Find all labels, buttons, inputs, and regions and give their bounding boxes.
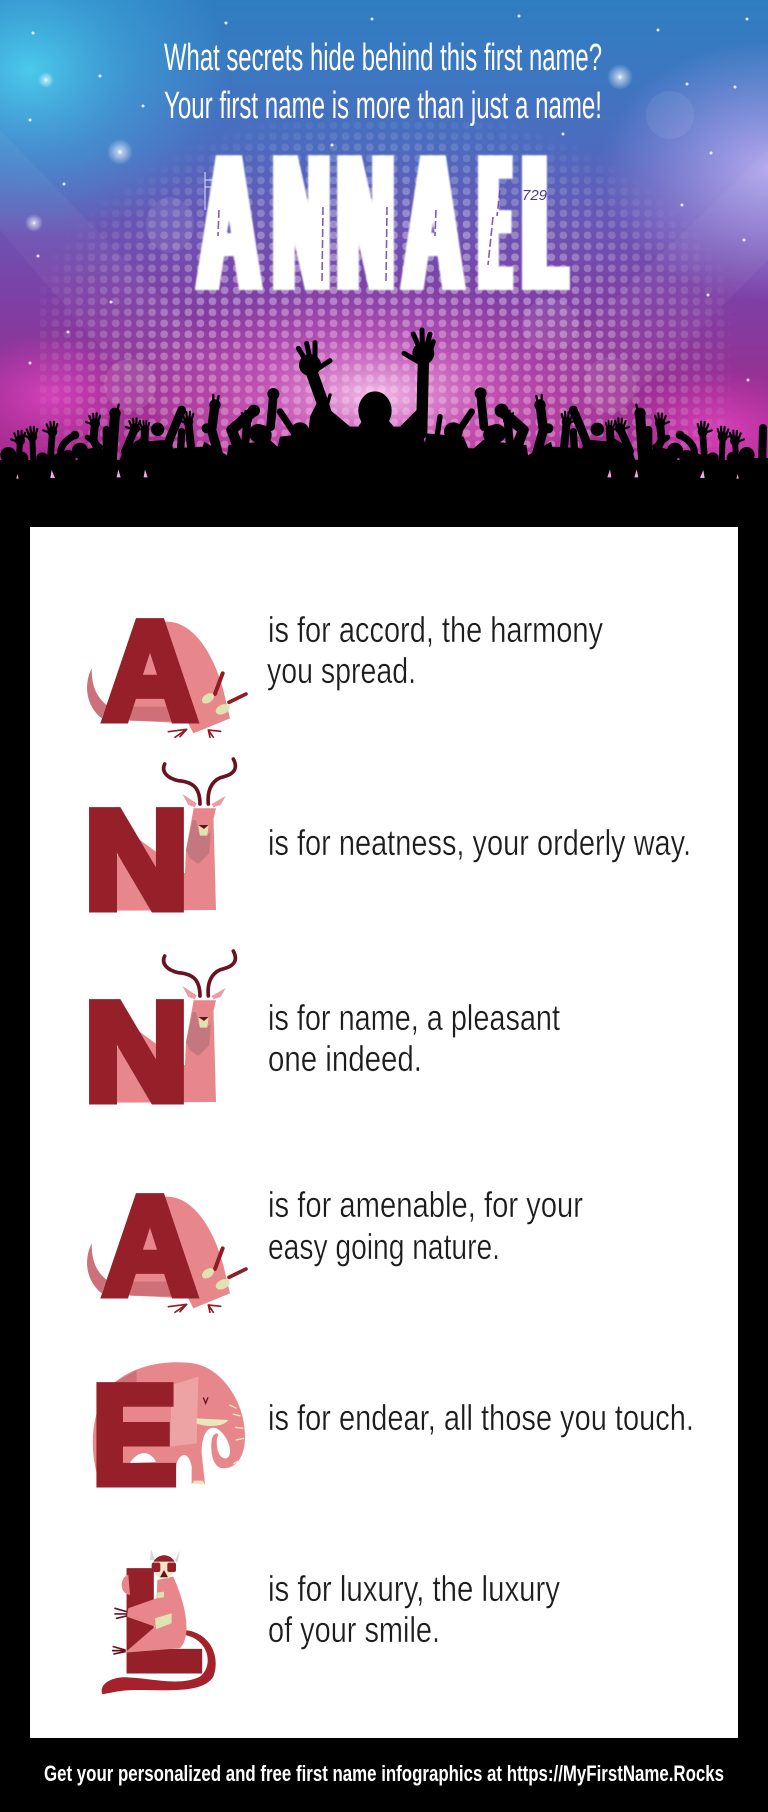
- first name title: A: [199, 114, 259, 330]
- caption for first A: you spread.: [267, 650, 416, 691]
- letter N: N: [84, 973, 189, 1130]
- letter L: L: [122, 1542, 202, 1699]
- header background: stage lights: [0, 0, 768, 510]
- letter A: A: [103, 1167, 197, 1324]
- white content panel: [30, 527, 738, 1738]
- caption for L: of your smile.: [268, 1609, 440, 1650]
- first name title: E: [484, 114, 507, 330]
- illustration: gazelle letter N repeated: [84, 951, 235, 1130]
- illustration: lemur letter L: [102, 1542, 216, 1699]
- illustration: armadillo letter A: [87, 592, 246, 749]
- letter N: N: [84, 781, 189, 938]
- first name title: A: [404, 114, 462, 330]
- text: L: [526, 114, 564, 330]
- caption for L: is for luxury, the luxury: [268, 1568, 560, 1609]
- elephant belly gap: [130, 1453, 156, 1463]
- caption for second N: one indeed.: [268, 1038, 422, 1079]
- first name title: 729: [522, 187, 548, 204]
- illustration: elephant letter E: [92, 1356, 245, 1513]
- illustration: armadillo letter A repeated: [87, 1167, 246, 1324]
- caption for second N: [268, 997, 560, 1079]
- first name title: [199, 114, 564, 330]
- letter E: E: [92, 1356, 177, 1513]
- caption for second A: is for amenable, for your: [268, 1184, 583, 1225]
- caption for second N: is for name, a pleasant: [268, 997, 560, 1038]
- first name title: N: [338, 114, 393, 330]
- illustration: gazelle letter N: [84, 759, 235, 938]
- first name title: N: [274, 114, 329, 330]
- caption for first A: [267, 609, 603, 691]
- caption for L: [268, 1568, 560, 1650]
- letter A: A: [103, 592, 197, 749]
- caption for second A: easy going nature.: [268, 1226, 500, 1267]
- caption for second A: [268, 1184, 583, 1267]
- crowd silhouette: [0, 330, 768, 536]
- caption for first A: is for accord, the harmony: [268, 609, 603, 650]
- header question text: [164, 37, 602, 127]
